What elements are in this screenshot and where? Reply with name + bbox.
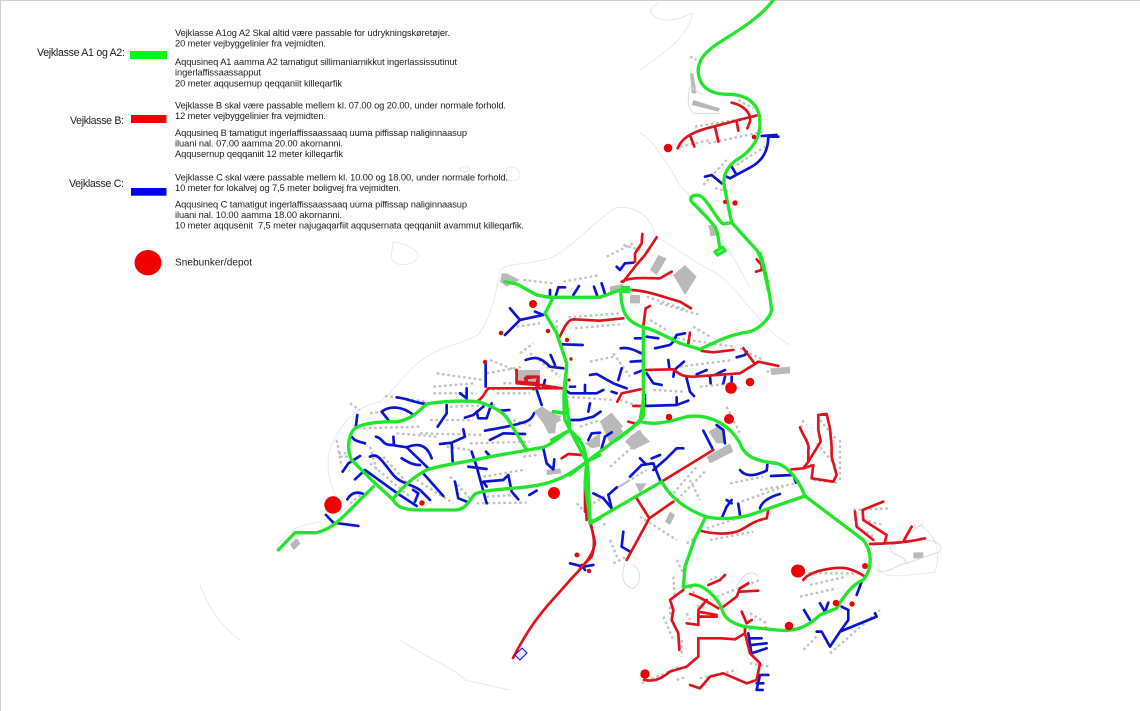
legend: class A1 and A2 description: 20 meter vejbyggelinier fra vejmidten. bbox=[175, 39, 326, 49]
legend: class B description: Aqqusernup qeqqaniit 12 meter killeqarfik bbox=[175, 149, 343, 159]
legend: class A1 and A2 description: ingerlaffissaassapput bbox=[175, 68, 261, 78]
legend: red swatch bbox=[131, 115, 166, 123]
legend: class C description: Aqqusineq C tamatigut ingerlaffissaassaaq uuma piffissap naliginnaasup bbox=[175, 200, 467, 210]
legend bbox=[37, 28, 524, 275]
legend: class C description: iluani nal. 10.00 aamma 18.00 akornanni. bbox=[175, 210, 342, 220]
legend: class C label: Vejklasse C: bbox=[69, 178, 124, 190]
legend: blue swatch bbox=[131, 188, 166, 196]
legend: depot symbol bbox=[134, 250, 162, 275]
legend: class C description: 10 meter aqqusenit 7,5 meter najugaqarfiit aqqusernata qeqqaniit avammut killeqarfik. bbox=[175, 221, 524, 231]
legend: class B description: 12 meter vejbyggelinier fra vejmidten. bbox=[175, 111, 326, 121]
map: snow bunkers / depots bbox=[324, 135, 868, 679]
legend: class A1 and A2 description bbox=[175, 28, 457, 88]
legend: class C description bbox=[175, 172, 524, 231]
map: class A1 and A2 roads (green) bbox=[278, 0, 870, 630]
legend: depot label: Snebunker/depot bbox=[175, 258, 252, 269]
map: small blue box at harbour bbox=[515, 648, 527, 660]
legend: class B description: Vejklasse B skal være passable mellem kl. 07.00 og 20.00, under normale forhold. bbox=[175, 100, 506, 110]
map: class C roads (blue) bbox=[326, 135, 877, 690]
map: buildings bbox=[290, 57, 941, 683]
legend: class C description: 10 meter for lokalvej og 7,5 meter boligvej fra vejmidten. bbox=[175, 183, 401, 193]
legend: class C description: Vejklasse C skal være passable mellem kl. 10.00 og 18.00, under normale forhold. bbox=[175, 172, 508, 182]
legend: green swatch bbox=[130, 51, 167, 59]
legend: class A1 and A2 description: Aqqusineq A1 aamma A2 tamatigut sillimaniarnikkut ingerlassissutinut bbox=[175, 57, 457, 67]
legend: class B label: Vejklasse B: bbox=[70, 115, 124, 127]
map: class B roads (red) bbox=[477, 103, 925, 688]
legend: class A1 and A2 label: Vejklasse A1 og A2: bbox=[37, 47, 125, 59]
map: coastline bbox=[200, 3, 938, 690]
legend: class A1 and A2 description: 20 meter aqqusernup qeqqaniit killeqarfik bbox=[175, 78, 342, 88]
legend: class B description bbox=[175, 100, 506, 159]
legend: class B description: Aqqusineq B tamatigut ingerlaffissaassaaq uuma piffissap naliginnaasup bbox=[175, 128, 467, 138]
legend: class B description: iluani nal. 07.00 aamma 20.00 akornanni. bbox=[175, 138, 343, 148]
legend: class A1 and A2 description: Vejklasse A1og A2 Skal altid være passable for udrykningskøretøjer. bbox=[175, 28, 450, 38]
